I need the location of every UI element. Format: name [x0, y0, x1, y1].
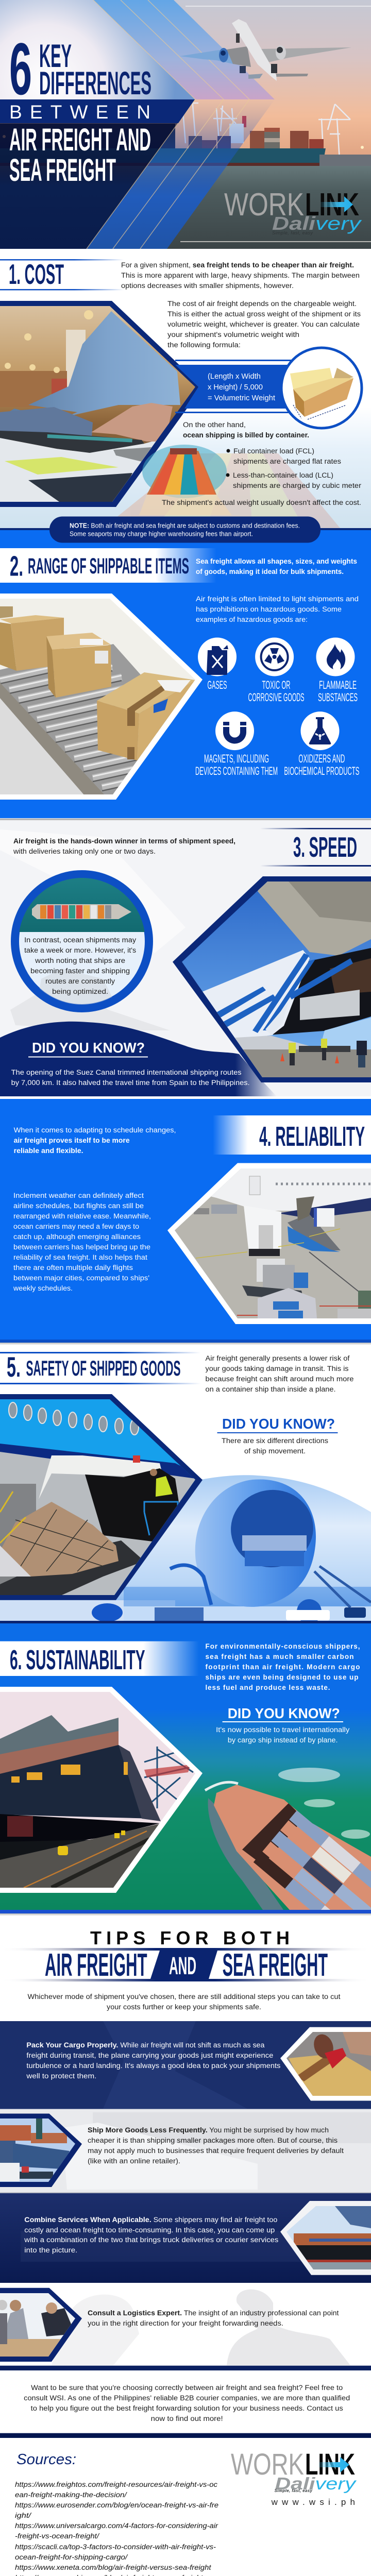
sustainability intro text	[205, 1642, 360, 1691]
tips intro text: your costs further or keep your shipments safe.	[107, 2003, 261, 2011]
source links: https://www.universalcargo.com/4-factors-for-considering-air	[15, 2522, 218, 2530]
tip 4 photo: meeting	[0, 2288, 82, 2362]
circle callout: ocean shipments	[15, 874, 149, 1010]
tips heading: AND	[169, 1953, 196, 1980]
did you know: ship movement: There are six different directions	[222, 1437, 328, 1445]
sea freight text	[196, 557, 357, 575]
air freight text	[196, 595, 359, 623]
photo: container ship at dock	[0, 1687, 203, 1893]
title: 6	[9, 28, 32, 110]
did you know wave: The opening of the Suez Canal trimmed international shipping routes	[11, 1069, 242, 1076]
closing call to action: Want to be sure that you're choosing correctly between air freight and sea freight? Feel free to	[31, 2384, 343, 2392]
section 1: cost	[0, 258, 371, 528]
tip 2 photo: containers and truck	[0, 2113, 82, 2187]
reliability body text: between carriers has helped bring up the	[13, 1243, 150, 1251]
footer logo: Dali	[275, 2474, 316, 2493]
logo: Worklink Dalivery: WORK	[224, 187, 304, 223]
reliability body text: catch up, although emerging alliances	[13, 1233, 141, 1241]
closing call to action: consult WSI. As one of the Philippines' reliable B2B courier companies, we are more than qualified	[24, 2394, 350, 2402]
source links: https://www.freightos.com/freight-resources/air-freight-vs-oc	[15, 2481, 217, 2488]
speed background	[0, 819, 371, 1096]
sea freight text: of goods, making it ideal for bulk shipments.	[196, 568, 344, 575]
ocean shipping text: ocean shipping is billed by container.	[183, 431, 309, 439]
reliability intro text	[14, 1126, 176, 1155]
heading: 5. safety of shipped goods: SAFETY OF SHIPPED GOODS	[26, 1356, 180, 1380]
did you know: cargo ship travel: by cargo ship instead of by plane.	[228, 1736, 338, 1744]
aerial container ship	[204, 1768, 371, 1910]
tip 4 text: you in the right direction for your freight forwarding needs.	[88, 2319, 283, 2327]
sustainability intro text: ships are even being designed to use up	[205, 1673, 359, 1681]
tip 1 text: well to protect them.	[26, 2072, 96, 2080]
icon: gases	[198, 638, 237, 691]
intro text: options decreases with smaller shipments, however.	[121, 282, 294, 290]
logo: Worklink Dalivery: Simple, fast, easy	[272, 230, 313, 235]
circle callout text: being optimized.	[52, 988, 108, 995]
air freight text: has prohibitions on hazardous goods. Some	[196, 605, 342, 613]
title: DIFFERENCES	[39, 65, 151, 101]
chargeable weight text: This is either the actual gross weight of the shipment or its	[167, 310, 361, 318]
tips intro text: Whichever mode of shipment you've chosen, there are still additional steps you can take to cut	[28, 1993, 341, 2001]
tips heading	[0, 1927, 371, 1983]
safety intro text	[205, 1354, 353, 1393]
reliability intro text: When it comes to adapting to schedule changes,	[14, 1126, 176, 1134]
heading: 1. cost: 1. COST	[9, 258, 64, 290]
intro text: For a given shipment, sea freight tends to be cheaper than air freight.	[121, 261, 354, 269]
safety intro text: on a container ship than inside a plane.	[205, 1385, 336, 1393]
speed intro text: with deliveries taking only one or two days.	[13, 848, 156, 855]
section 2: range of shippable items	[0, 516, 371, 818]
title: BETWEEN	[9, 101, 150, 123]
reliability body text: between major cities, compared to ships'	[13, 1274, 149, 1282]
airplane	[180, 19, 351, 81]
ocean shipping text: On the other hand,	[183, 421, 246, 429]
safety intro text: Air freight generally presents a lower risk of	[205, 1354, 350, 1362]
photo: cargo plane loading	[173, 876, 371, 1082]
did you know wave: by 7,000 km. It also halved the travel time from Spain to the Philippines.	[11, 1079, 250, 1087]
chargeable weight text: volumetric weight, whichever is greater. You can calculate	[167, 320, 360, 328]
heading: 2. range of shippable items: RANGE OF SHIPPABLE ITEMS	[28, 554, 189, 579]
sustainability intro text: sea freight has a much smaller carbon	[205, 1653, 353, 1660]
bullets: FCL and LCL: Less-than-container load (LCL)	[233, 471, 333, 479]
circle callout text: becoming faster and shipping	[30, 967, 130, 975]
heading: 3. speed	[260, 828, 371, 867]
bullets: FCL and LCL: shipments are charged flat rates	[233, 457, 341, 465]
heading: 4. reliability	[213, 1115, 371, 1155]
source links: ocean-freight-for-shipping-cargo/	[15, 2553, 128, 2561]
tip 3: combine services	[0, 2193, 371, 2283]
did you know: ship movement	[217, 1416, 338, 1455]
tip 3 text	[24, 2216, 279, 2254]
chargeable weight text	[167, 300, 361, 349]
icon: magnets: MAGNETS, INCLUDING	[204, 752, 269, 765]
did you know: ship movement: of ship movement.	[244, 1447, 306, 1455]
bullets: FCL and LCL: Full container load (FCL)	[233, 447, 314, 455]
chargeable weight text: your shipment's volumetric weight with	[167, 331, 299, 338]
heading: 6. sustainability: 6. SUSTAINABILITY	[10, 1645, 145, 1675]
footer divider band	[0, 2433, 371, 2438]
icon: oxidizers	[284, 711, 359, 777]
photo: plane cargo door	[0, 1394, 203, 1600]
air freight text: Air freight is often limited to light shipments and	[196, 595, 359, 603]
title: AIR FREIGHT AND	[9, 122, 151, 157]
bullets: FCL and LCL: shipments are charged by cubic meter	[233, 482, 362, 489]
tip 1 photo: tape on box	[280, 2027, 371, 2101]
reliability body text: rearranged with relative ease. Meanwhile,	[13, 1212, 151, 1220]
closing call to action	[24, 2384, 350, 2422]
tip 4 text: Consult a Logistics Expert. The insight of an industry professional can point	[88, 2309, 339, 2317]
hero photo: port and sky	[0, 0, 371, 249]
tip 1 text	[26, 2041, 281, 2080]
photo: hand on calculator	[0, 301, 203, 507]
intro text	[121, 261, 360, 290]
heading: 2. range of shippable items	[0, 548, 216, 583]
closing call to action: now to find out more!	[151, 2415, 223, 2422]
safety intro text: because freight can shift around much more	[205, 1375, 353, 1383]
photo: airport apron	[167, 1163, 371, 1324]
tip 1: pack your cargo	[0, 2021, 371, 2109]
logo: Worklink Dalivery	[224, 193, 362, 235]
formula band: = Volumetric Weight	[208, 394, 275, 402]
icon: cardboard box circle	[281, 348, 362, 428]
formula band	[175, 360, 299, 413]
section 6: sustainability	[0, 1623, 371, 1945]
reliability body text: Inclement weather can definitely affect	[13, 1192, 144, 1199]
did you know wave	[0, 1022, 277, 1096]
title: KEY	[39, 38, 72, 74]
footer logo: very	[315, 2474, 357, 2493]
icon: toxic or corrosive goods: TOXIC OR	[262, 679, 291, 691]
photo: boxes on conveyor	[0, 594, 206, 800]
bullets: FCL and LCL: The shipment's actual weight usually doesn't affect the cost.	[162, 499, 361, 506]
did you know: cargo ship travel: DID YOU KNOW?	[228, 1705, 340, 1721]
tip 3 photo: plane and ship	[280, 2201, 371, 2275]
source links: ight/	[15, 2512, 31, 2519]
tip 4 text	[88, 2309, 339, 2327]
icon: gases: GASES	[207, 679, 227, 691]
section 3: speed	[0, 819, 371, 1096]
reliability body text: weekly schedules.	[13, 1284, 73, 1292]
logo: Worklink Dalivery: Dali	[272, 213, 316, 234]
closing call to action: to help you figure out the best freight forwarding solution for your business needs. Contact us	[31, 2404, 343, 2412]
sustainability sea background	[0, 1623, 371, 1916]
cost background	[0, 407, 371, 528]
source links: https://scacli.ca/top-3-factors-to-consider-with-air-freight-vs-	[15, 2543, 216, 2551]
hero chevron bands	[0, 0, 275, 249]
tip 3 text: costly and ocean freight too time-consuming. In this case, you can come up	[24, 2226, 275, 2234]
circle callout text	[24, 936, 136, 995]
bullets: FCL and LCL	[162, 447, 362, 506]
footer logo: WORK	[231, 2448, 304, 2481]
logo: Worklink Dalivery: very	[315, 213, 362, 234]
blue background	[0, 528, 371, 818]
tip 3 text: into the picture.	[24, 2246, 77, 2254]
tips intro text	[28, 1993, 341, 2011]
sources heading: Sources:	[16, 2451, 76, 2468]
circle callout text: take a week or more. However, it's	[24, 946, 136, 954]
sustainability intro text: less fuel and produce less waste.	[205, 1684, 330, 1691]
sustainability intro text: footprint than air freight. Modern cargo	[205, 1663, 360, 1671]
hero banner	[0, 0, 371, 249]
source links: https://www.eurosender.com/blog/en/ocean-freight-vs-air-fre	[15, 2501, 218, 2509]
sea freight text: Sea freight allows all shapes, sizes, and weights	[196, 557, 357, 565]
tip 1 text: turbulence or a hard landing. It's always a good idea to pack your shipments	[26, 2062, 281, 2070]
did you know: ship movement: DID YOU KNOW?	[222, 1416, 335, 1432]
tip 1 text: Pack Your Cargo Properly. While air freight will not shift as much as sea	[26, 2041, 265, 2049]
source links: https://www.xeneta.com/blog/air-freight-versus-sea-freight	[15, 2564, 212, 2571]
chargeable weight text: the following formula:	[167, 341, 241, 349]
did you know: cargo ship travel	[216, 1705, 349, 1744]
source links: -freight-vs-ocean-freight/	[15, 2532, 99, 2540]
safety intro text: your goods taking damage in transit. This is	[205, 1365, 349, 1372]
heading: 5. safety of shipped goods: 5.	[7, 1351, 21, 1383]
source links: ean-freight-making-the-decision/	[15, 2491, 127, 2499]
chargeable weight text: The cost of air freight depends on the chargeable weight.	[167, 300, 357, 308]
tip 2 text: (like with an online retailer).	[88, 2157, 180, 2165]
circle callout text: worth noting that ships are	[35, 957, 125, 964]
icon: container ship	[139, 445, 232, 515]
section 4: reliability	[0, 1099, 371, 1345]
reliability body text	[13, 1192, 151, 1292]
reliability body text: reliability of sea freight. It also helps that	[13, 1253, 147, 1261]
intro text: This is more apparent with large, heavy shipments. The margin between	[121, 272, 360, 279]
source links	[15, 2481, 218, 2576]
circle callout text: In contrast, ocean shipments may	[24, 936, 136, 944]
title: SEA FREIGHT	[9, 152, 116, 188]
heading: 6. sustainability	[0, 1641, 199, 1676]
reliability background	[0, 1099, 371, 1345]
tip 2 text	[88, 2126, 344, 2165]
did you know wave: DID YOU KNOW?	[32, 1040, 145, 1056]
tip 2 text: Ship More Goods Less Frequently. You might be surprised by how much	[88, 2126, 329, 2134]
tip 2: ship more goods	[0, 2109, 371, 2193]
tip 3 text: with a combination of the two that brings truck deliveries or courier services	[24, 2236, 279, 2244]
tips heading: TIPS FOR BOTH	[90, 1927, 290, 1948]
icon: toxic or corrosive goods	[248, 638, 304, 704]
sustainability intro text: For environmentally-conscious shippers,	[205, 1642, 360, 1650]
footer logo: Simple, fast, easy	[275, 2488, 313, 2493]
icon: magnets	[195, 711, 278, 777]
title	[0, 43, 195, 181]
heading: 5. safety of shipped goods	[0, 1351, 201, 1384]
section 5: safety of shipped goods	[0, 1351, 371, 1624]
circle callout text: routes are constantly	[45, 977, 115, 985]
footer logo: www.wsi.ph	[271, 2497, 355, 2507]
note pill: NOTE: Both air freight and sea freight are subject to customs and destination fees.	[70, 522, 300, 530]
tips heading: AIR FREIGHT	[45, 1947, 147, 1983]
did you know: cargo ship travel: It's now possible to travel internationally	[216, 1726, 349, 1734]
heading: 2. range of shippable items: 2.	[10, 550, 23, 582]
air freight text: examples of hazardous goods are:	[196, 616, 308, 623]
section 2: range of shippable items: CORROSIVE GOODS	[248, 691, 304, 704]
formula band: x Height) / 5,000	[208, 383, 263, 392]
icon: magnets: DEVICES CONTAINING THEM	[195, 765, 278, 777]
reliability body text: ocean carriers may need a few days to	[13, 1223, 139, 1230]
tip 2 text: may not apply much to businesses that require frequent deliveries by default	[88, 2147, 344, 2155]
note pill: Some seaports may charge higher warehousing fees than airport.	[70, 531, 253, 538]
formula band: (Length x Width	[208, 372, 261, 381]
tip 2 text: cheaper it is than shipping smaller packages more often. But of course, this	[88, 2137, 338, 2144]
reliability body text: there are often multiple daily flights	[13, 1264, 133, 1272]
tip 3 text: Combine Services When Applicable. Some shippers may find air freight too	[24, 2216, 277, 2224]
tip 1 text: freight during transit, the plane carrying your goods just might experience	[26, 2052, 273, 2059]
speed intro text	[13, 837, 235, 855]
ocean shipping text	[183, 421, 309, 439]
note pill	[49, 516, 321, 543]
icon: flammable substances	[316, 638, 358, 704]
speed intro text: Air freight is the hands-down winner in terms of shipment speed,	[13, 837, 235, 845]
footer logo	[231, 2448, 357, 2507]
reliability intro text: air freight proves itself to be more	[14, 1137, 130, 1144]
reliability body text: airline schedules, but flights can still be	[13, 1202, 144, 1210]
tinted photo: plane nose open	[0, 1475, 371, 1624]
reliability intro text: reliable and flexible.	[14, 1147, 83, 1155]
tip 4: consult a logistics expert	[0, 2283, 371, 2370]
